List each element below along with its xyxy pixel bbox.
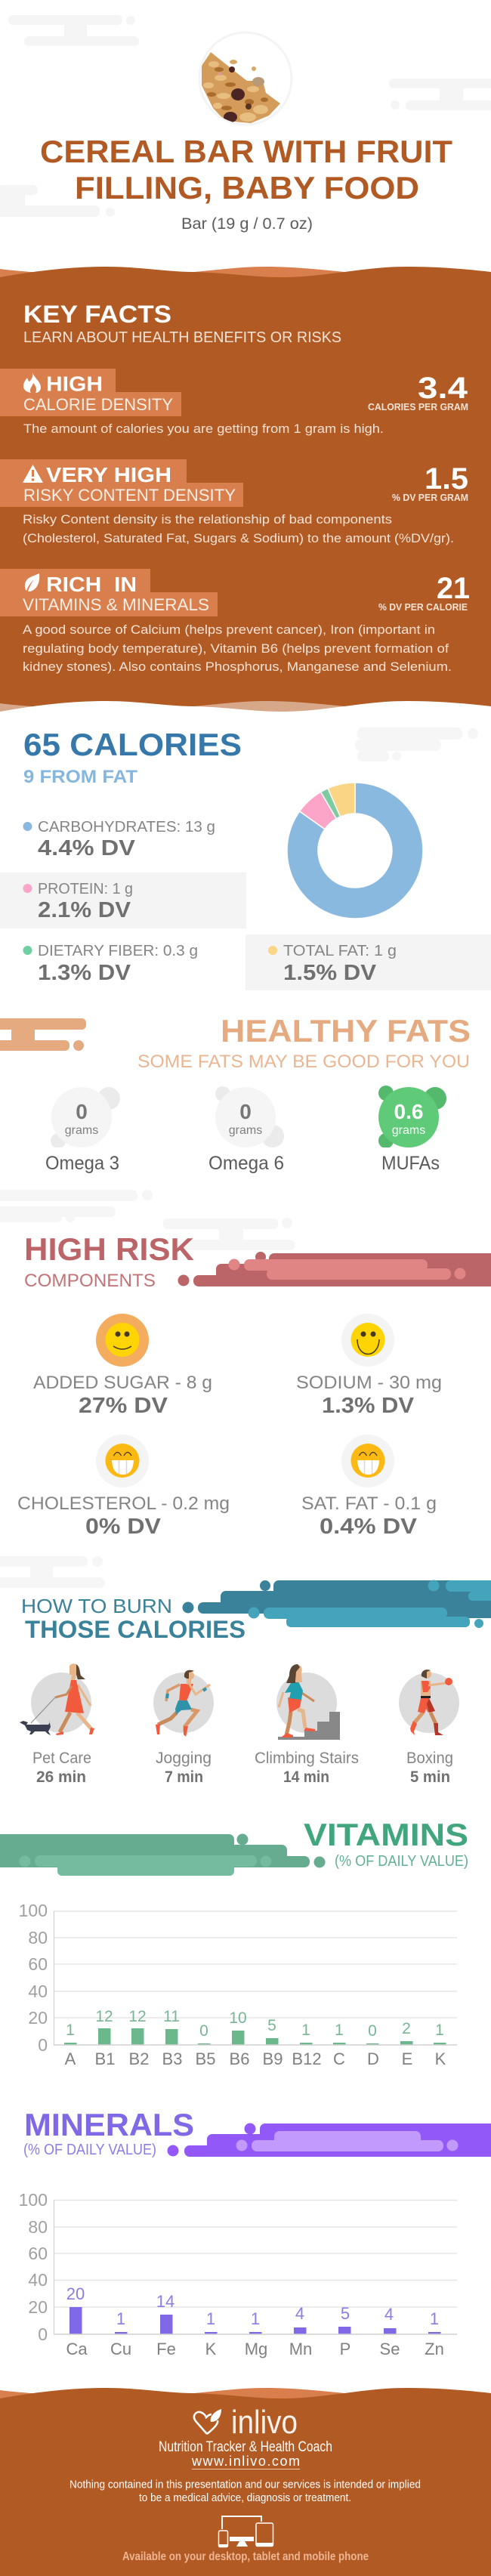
risk: cholesterol	[17, 1435, 230, 1539]
serving size: Bar (19 g / 0.7 oz)	[181, 215, 313, 233]
bar chart: vitamins: A	[65, 2049, 76, 2068]
bar chart: vitamins: 10	[229, 2009, 247, 2027]
bar chart: vitamins: B1	[95, 2049, 115, 2068]
heading: calories	[23, 727, 242, 787]
bar chart: vitamins: E	[402, 2049, 412, 2068]
bar chart: minerals: Zn	[425, 2340, 444, 2358]
heading: minerals: (% OF DAILY VALUE)	[23, 2142, 156, 2158]
risk: saturated fat: SAT. FAT - 0.1 g	[301, 1493, 437, 1514]
key fact: calorie density: CALORIE DENSITY	[23, 395, 173, 414]
heading: how to burn those calories: THOSE CALORIES	[25, 1616, 246, 1643]
key fact: risky content density: % DV PER GRAM	[392, 492, 468, 503]
bar chart: minerals: 1	[116, 2309, 125, 2328]
legend: protein: PROTEIN: 1 g	[38, 881, 133, 897]
heading: vitamins: VITAMINS	[304, 1817, 468, 1852]
bar chart: vitamins	[19, 1901, 457, 2068]
key fact: calorie density	[0, 369, 468, 436]
activity: climbing stairs: Climbing Stairs	[255, 1750, 359, 1767]
heading: vitamins: (% OF DAILY VALUE)	[335, 1853, 468, 1870]
heading: healthy fats	[137, 1013, 471, 1072]
icon: leaf	[25, 573, 39, 591]
bar chart: vitamins: C	[333, 2049, 345, 2068]
icon: boxer	[410, 1669, 452, 1735]
stat: omega 3	[45, 1087, 120, 1174]
bar chart: minerals: Mn	[289, 2340, 312, 2358]
banner: burn calories	[183, 1580, 491, 1628]
icon: devices	[219, 2516, 273, 2547]
activity: jogging	[153, 1670, 214, 1786]
bar chart: vitamins: 40	[28, 1981, 48, 2001]
legend: carbohydrates: 4.4% DV	[38, 836, 136, 860]
bar chart: minerals: Ca	[66, 2340, 88, 2358]
bar chart: minerals: Se	[380, 2340, 400, 2358]
availability note: Available on your desktop, tablet and mobile phone	[122, 2550, 369, 2563]
bar chart: vitamins: B3	[162, 2049, 182, 2068]
risk: cholesterol: CHOLESTEROL - 0.2 mg	[17, 1493, 230, 1514]
title: CEREAL BAR WITH FRUIT	[40, 134, 452, 169]
bar chart: vitamins: B2	[129, 2049, 149, 2068]
bar chart: vitamins: B5	[196, 2049, 215, 2068]
key fact: rich in vitamins and minerals	[0, 569, 470, 674]
legend: carbohydrates: CARBOHYDRATES: 13 g	[38, 819, 215, 836]
key fact: risky content density: Risky Content density is the relationship of bad components	[23, 512, 392, 527]
key fact: risky content density: 1.5	[425, 462, 468, 496]
bar chart: vitamins: K	[435, 2049, 446, 2068]
activity: boxing: Boxing	[406, 1750, 453, 1767]
panel: footer	[0, 2388, 491, 2576]
legend: protein	[23, 881, 133, 922]
title: FILLING, BABY FOOD	[75, 170, 419, 205]
logo: inlivo	[194, 2404, 298, 2441]
bar chart: vitamins: 12	[128, 2008, 147, 2025]
stat: mufas: 0.6	[394, 1100, 423, 1123]
panel: high risk components	[0, 1190, 491, 1539]
banner: healthy fats	[0, 1018, 86, 1051]
bar chart: vitamins: 80	[28, 1928, 48, 1947]
activity: jogging: Jogging	[156, 1750, 212, 1767]
bar chart: vitamins: B9	[263, 2049, 283, 2068]
icon: big smile face	[341, 1314, 394, 1367]
key fact: risky content density: RISKY CONTENT DENSITY	[23, 486, 236, 505]
heading: how to burn those calories: HOW TO BURN	[21, 1595, 172, 1617]
activity: climbing stairs: 14 min	[283, 1768, 329, 1786]
legend: total fat	[268, 943, 397, 985]
heading: minerals: MINERALS	[24, 2107, 194, 2142]
risk: added sugar: ADDED SUGAR - 8 g	[33, 1373, 212, 1393]
bar chart: minerals: K	[205, 2340, 217, 2358]
bar chart: minerals: 4	[295, 2304, 304, 2323]
bar chart: vitamins: 1	[66, 2022, 75, 2039]
heading: high risk	[24, 1231, 194, 1291]
heading: key facts: LEARN ABOUT HEALTH BENEFITS OR RISKS	[23, 329, 341, 346]
banner: high risk	[178, 1252, 491, 1286]
risk: sodium	[296, 1314, 442, 1418]
key fact: rich in vitamins and minerals: 21	[437, 572, 470, 605]
key fact: rich in vitamins and minerals: RICH IN	[46, 573, 137, 596]
activity: boxing	[399, 1669, 459, 1786]
activity: pet care: 26 min	[36, 1768, 86, 1786]
bar chart: minerals: P	[340, 2340, 350, 2358]
donut chart	[287, 783, 423, 919]
key fact: rich in vitamins and minerals: regulating body temperature), Vitamin B6 (helps prevent formation of	[23, 641, 449, 656]
bar chart: minerals: 0	[38, 2324, 48, 2344]
bar chart: minerals: 1	[430, 2309, 439, 2328]
bar chart: vitamins: 1	[335, 2022, 344, 2039]
stat: mufas: MUFAs	[381, 1153, 440, 1174]
bar chart: vitamins: 0	[368, 2022, 377, 2040]
key fact: rich in vitamins and minerals: VITAMINS & MINERALS	[23, 595, 209, 614]
heading: calories: 65 CALORIES	[23, 727, 242, 762]
website link: www.inlivo.com	[191, 2454, 300, 2469]
stat: omega 3: 0	[76, 1100, 88, 1123]
bar chart: vitamins: 60	[28, 1954, 48, 1974]
icon: woman walking dog	[20, 1663, 94, 1735]
icon: grin face	[96, 1435, 149, 1487]
heading: calories: 9 FROM FAT	[23, 767, 137, 787]
bar chart: vitamins: 5	[267, 2017, 276, 2034]
banner: vitamins	[0, 1834, 325, 1876]
stat: omega 6: grams	[229, 1124, 262, 1137]
bar chart: minerals: 20	[28, 2297, 48, 2317]
bar chart: vitamins: 100	[19, 1901, 48, 1920]
bar chart: vitamins: 1	[301, 2022, 310, 2039]
panel: vitamins	[0, 1817, 468, 2068]
icon: woman climbing stairs	[278, 1664, 340, 1740]
risk: added sugar: 27% DV	[79, 1394, 168, 1418]
heading: key facts: KEY FACTS	[23, 301, 171, 328]
bar chart: vitamins: B12	[292, 2049, 322, 2068]
panel: healthy fats	[0, 1013, 471, 1174]
bar chart: minerals: 100	[19, 2190, 48, 2210]
risk: saturated fat: 0.4% DV	[320, 1515, 418, 1539]
heading: healthy fats: SOME FATS MAY BE GOOD FOR YOU	[137, 1052, 470, 1072]
key fact: calorie density: HIGH	[46, 372, 103, 396]
icon: flame	[23, 372, 41, 393]
bar chart: minerals: 60	[28, 2244, 48, 2263]
panel: how to burn calories	[0, 1556, 491, 1786]
risk: sodium: SODIUM - 30 mg	[296, 1373, 442, 1393]
stat: omega 6: 0	[239, 1100, 252, 1123]
stat: omega 6: Omega 6	[208, 1153, 284, 1174]
bar chart: minerals: 1	[251, 2309, 260, 2328]
tagline: Nutrition Tracker & Health Coach	[159, 2439, 332, 2455]
icon: smile face	[96, 1314, 149, 1367]
bar chart: vitamins: 20	[28, 2008, 48, 2028]
disclaimer: to be a medical advice, diagnosis or treatment.	[139, 2491, 351, 2504]
disclaimer	[69, 2478, 421, 2504]
legend: dietary fiber: 1.3% DV	[38, 961, 131, 985]
bar chart: vitamins: 11	[163, 2008, 180, 2025]
legend: total fat: 1.5% DV	[283, 961, 377, 985]
logo: inlivo: inlivo	[231, 2404, 298, 2441]
bar chart: vitamins: 2	[402, 2020, 411, 2037]
heading: vitamins	[304, 1817, 468, 1870]
key fact: risky content density: (Cholesterol, Saturated Fat, Sugars & Sodium) to the amount (%DV/gr).	[23, 531, 454, 545]
legend: carbohydrates	[23, 819, 215, 860]
risk: added sugar	[33, 1314, 212, 1418]
legend: dietary fiber	[23, 943, 198, 985]
icon: warning triangle	[23, 465, 43, 483]
key fact: calorie density: The amount of calories you are getting from 1 gram is high.	[23, 422, 384, 436]
heading: key facts	[23, 301, 341, 346]
title	[40, 134, 452, 205]
key fact: calorie density: 3.4	[418, 372, 468, 405]
legend: total fat: TOTAL FAT: 1 g	[283, 943, 397, 959]
icon: grin face	[341, 1435, 394, 1487]
risk: saturated fat	[301, 1435, 437, 1539]
legend: dietary fiber: DIETARY FIBER: 0.3 g	[38, 943, 198, 959]
bar chart: vitamins: 0	[38, 2035, 48, 2055]
key fact: rich in vitamins and minerals: % DV PER CALORIE	[378, 601, 468, 613]
bar chart: minerals: 4	[384, 2305, 394, 2324]
stat: omega 3: Omega 3	[45, 1153, 119, 1174]
bar chart: minerals	[19, 2190, 457, 2358]
activity: pet care: Pet Care	[32, 1750, 91, 1767]
banner: minerals	[168, 2123, 491, 2157]
bar chart: minerals: 40	[28, 2270, 48, 2290]
bar chart: vitamins: D	[367, 2049, 379, 2068]
key fact: rich in vitamins and minerals: kidney stones). Also contains Phosphorus, Manganese and Selenium.	[23, 659, 452, 674]
panel: calories	[0, 727, 491, 990]
bar chart: vitamins: B6	[230, 2049, 249, 2068]
icon: jogger	[156, 1670, 210, 1737]
bar chart: minerals: Mg	[245, 2340, 267, 2358]
panel: minerals	[19, 2107, 491, 2358]
heading: high risk: COMPONENTS	[24, 1271, 156, 1291]
bar chart: vitamins: 0	[199, 2022, 208, 2040]
activity: jogging: 7 min	[165, 1768, 203, 1786]
legend: protein: 2.1% DV	[38, 898, 131, 922]
bar chart: minerals: Cu	[110, 2340, 131, 2358]
key fact: rich in vitamins and minerals: A good source of Calcium (helps prevent cancer), Iron (important in	[23, 622, 435, 637]
heading: minerals	[23, 2107, 194, 2158]
stat: mufas	[378, 1086, 446, 1174]
header panel	[0, 15, 491, 233]
activity: pet care	[20, 1663, 94, 1786]
key fact: risky content density	[0, 459, 468, 545]
key fact: calorie density: CALORIES PER GRAM	[368, 401, 468, 412]
stat: omega 6	[208, 1086, 284, 1174]
bar chart: vitamins: 12	[95, 2008, 113, 2025]
key fact: risky content density: VERY HIGH	[46, 463, 171, 486]
stat: omega 3: grams	[65, 1124, 98, 1137]
bar chart: minerals: 80	[28, 2217, 48, 2237]
heading: healthy fats: HEALTHY FATS	[221, 1013, 471, 1049]
bar chart: minerals: Fe	[156, 2340, 176, 2358]
activity: boxing: 5 min	[410, 1768, 450, 1786]
bar chart: vitamins: 1	[435, 2022, 444, 2039]
bar chart: minerals: 14	[156, 2292, 174, 2311]
heading: how to burn those calories	[21, 1595, 246, 1643]
disclaimer: Nothing contained in this presentation and our services is intended or implied	[69, 2478, 421, 2491]
bar chart: minerals: 1	[206, 2309, 215, 2328]
panel: key facts	[0, 267, 491, 737]
activity: climbing stairs	[255, 1664, 359, 1786]
risk: sodium: 1.3% DV	[322, 1394, 415, 1418]
risk: cholesterol: 0% DV	[85, 1515, 162, 1539]
icon: cereal bar food photo	[199, 32, 292, 125]
bar chart: minerals: 20	[66, 2284, 85, 2303]
stat: mufas: grams	[392, 1124, 425, 1137]
heading: high risk: HIGH RISK	[24, 1231, 194, 1267]
bar chart: minerals: 5	[341, 2304, 350, 2323]
